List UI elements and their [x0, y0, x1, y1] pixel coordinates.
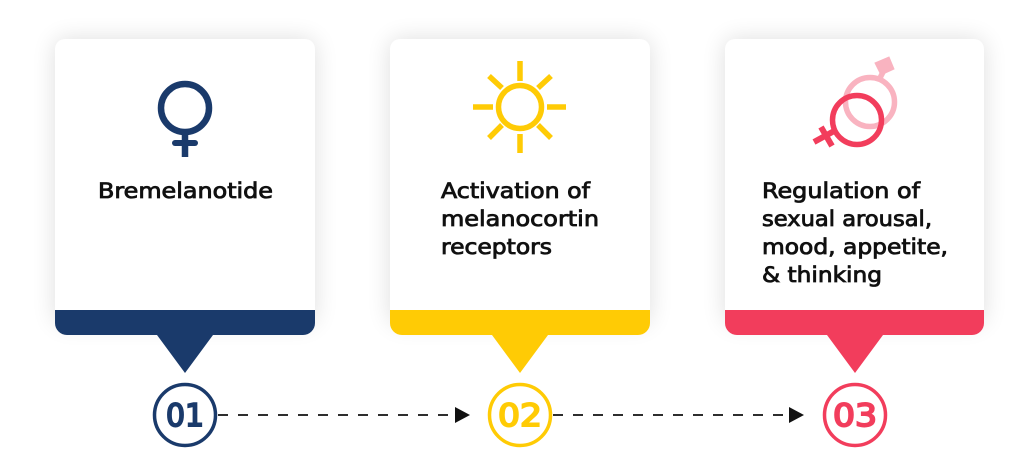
- colour band: red: [725, 310, 984, 373]
- arrow: 01 to 02: [218, 407, 470, 423]
- text: regulation list: [762, 179, 948, 288]
- step number 01: 01: [166, 398, 204, 434]
- colour band: yellow: [390, 310, 650, 373]
- step number 03: [824, 384, 886, 446]
- colour band: navy: [55, 310, 315, 373]
- step number 02: [490, 384, 550, 446]
- icon: sun: [473, 61, 566, 153]
- text: activation of melanocortin receptors: Activation of: [441, 179, 590, 204]
- text: activation of melanocortin receptors: receptors: [441, 235, 552, 260]
- icon: female symbol: [161, 84, 209, 157]
- panel: step 1 Bremelanotide: [55, 39, 315, 373]
- step number 01: [154, 384, 216, 446]
- text: activation of melanocortin receptors: [441, 179, 599, 260]
- text: activation of melanocortin receptors: melanocortin: [441, 207, 599, 232]
- text: regulation list: sexual arousal,: [762, 207, 932, 232]
- text: regulation list: mood, appetite,: [762, 235, 948, 260]
- panel: step 2 activation: [390, 39, 650, 373]
- step number 02: 02: [498, 398, 542, 434]
- panel: step 3 regulation: [725, 39, 984, 373]
- arrow: 02 to 03: [553, 407, 804, 423]
- icon: male and female symbols: [814, 57, 894, 146]
- text: regulation list: Regulation of: [762, 179, 920, 204]
- step number 03: 03: [833, 398, 877, 434]
- text: regulation list: & thinking: [762, 263, 882, 288]
- heading: Bremelanotide: Bremelanotide: [98, 179, 273, 204]
